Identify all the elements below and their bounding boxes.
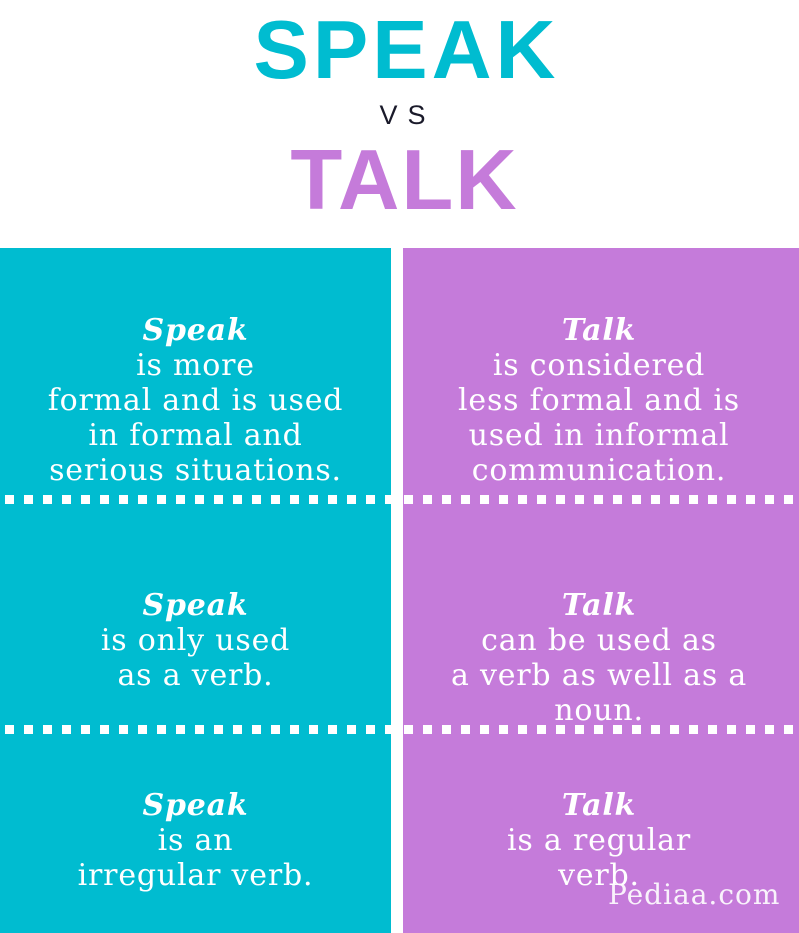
text: speak formal: serious situations. xyxy=(49,453,342,488)
text: talk verb noun: Talk xyxy=(562,588,636,623)
text: talk regular: Talk xyxy=(562,788,636,823)
text: talk verb noun: can be used as xyxy=(481,623,717,658)
panel: talk column xyxy=(403,248,799,933)
text: speak verb: as a verb. xyxy=(117,658,274,693)
text: talk regular: is a regular xyxy=(507,823,691,858)
text: talk informal: less formal and is xyxy=(458,383,740,418)
text: talk informal: is considered xyxy=(493,348,705,383)
title: vs: VS xyxy=(379,100,436,130)
text: speak irregular: irregular verb. xyxy=(78,858,313,893)
panel: speak column xyxy=(0,248,391,933)
text: speak formal: is more xyxy=(136,348,255,383)
text: talk verb noun: a verb as well as a xyxy=(451,658,747,693)
text: talk informal: communication. xyxy=(472,453,726,488)
text: speak irregular: Speak xyxy=(143,788,248,823)
text: speak verb: Speak xyxy=(143,588,248,623)
text: talk informal xyxy=(458,313,740,488)
text: speak irregular: is an xyxy=(158,823,233,858)
text: speak formal: in formal and xyxy=(88,418,303,453)
text: speak verb xyxy=(101,588,290,693)
text: speak formal: formal and is used xyxy=(48,383,343,418)
text: speak verb: is only used xyxy=(101,623,290,658)
text: speak formal xyxy=(48,313,343,488)
text: talk regular: verb. xyxy=(558,858,640,893)
title: SPEAK: SPEAK xyxy=(254,3,559,96)
text: speak irregular xyxy=(78,788,313,893)
title: TALK: TALK xyxy=(290,133,519,228)
text: talk verb noun: noun. xyxy=(554,693,644,728)
text: talk regular xyxy=(507,788,691,893)
text: speak formal: Speak xyxy=(143,313,248,348)
text: talk verb noun xyxy=(451,588,747,728)
watermark: Pediaa.com: Pediaa.com xyxy=(608,878,780,911)
text: talk informal: Talk xyxy=(562,313,636,348)
text: talk informal: used in informal xyxy=(469,418,729,453)
